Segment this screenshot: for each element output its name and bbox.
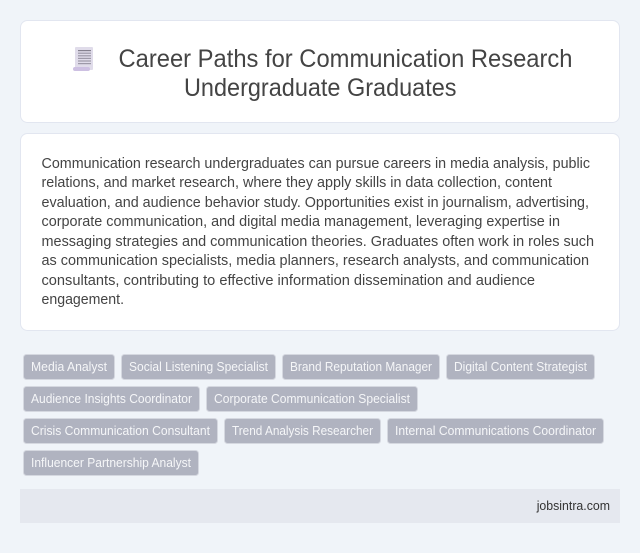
tag: Internal Communications Coordinator: Internal Communications Coordinator: [395, 424, 596, 438]
title: Undergraduate Graduates: [184, 74, 456, 102]
tag: Corporate Communication Specialist: Corporate Communication Specialist: [214, 392, 411, 406]
tag: Brand Reputation Manager: [282, 354, 440, 380]
career tags: [24, 354, 604, 476]
icon: document scroll: [73, 47, 93, 71]
tag: Influencer Partnership Analyst: [24, 450, 198, 476]
description text: engagement.: [42, 292, 124, 308]
tag: Influencer Partnership Analyst: Influencer Partnership Analyst: [31, 456, 191, 470]
description text: messaging strategies and communication theories. Graduates often work in roles such: [42, 234, 594, 250]
description text: evaluation, and audience behavior study. Opportunities exist in journalism, advertising,: [42, 195, 589, 211]
tag: Trend Analysis Researcher: [224, 418, 380, 444]
tag: Audience Insights Coordinator: [24, 386, 200, 412]
tag: Digital Content Strategist: Digital Content Strategist: [454, 360, 588, 374]
description text: consultants, contributing to effective information dissemination and audience: [42, 273, 535, 289]
tag: Digital Content Strategist: [446, 354, 594, 380]
tag: Media Analyst: [24, 354, 114, 380]
tag: Corporate Communication Specialist: [206, 386, 418, 412]
description panel: [20, 134, 620, 330]
tag: Media Analyst: Media Analyst: [31, 360, 108, 374]
tag: Crisis Communication Consultant: Crisis Communication Consultant: [31, 424, 211, 438]
description text: relations, and market research, where they apply skills in data collection, content: [42, 175, 552, 191]
header panel: [20, 20, 620, 122]
tag: Trend Analysis Researcher: Trend Analysis Researcher: [232, 424, 373, 438]
tag: Audience Insights Coordinator: Audience Insights Coordinator: [31, 392, 192, 406]
footer source text: jobsintra.com: [536, 498, 610, 513]
description text: [42, 156, 594, 308]
description text: Communication research undergraduates can pursue careers in media analysis, public: [42, 156, 590, 172]
tag: Internal Communications Coordinator: [388, 418, 604, 444]
tag: Social Listening Specialist: Social Listening Specialist: [129, 360, 269, 374]
description text: as communication specialists, media planners, research analysts, and communication: [42, 253, 589, 269]
description text: corporate communication, and digital media management, leveraging expertise in: [42, 214, 560, 230]
tag: Crisis Communication Consultant: [24, 418, 218, 444]
footer bar: [20, 489, 620, 523]
tag: Social Listening Specialist: [122, 354, 276, 380]
title: Career Paths for Communication Research: [118, 45, 572, 73]
title: [118, 45, 572, 102]
tag: Brand Reputation Manager: Brand Reputation Manager: [290, 360, 432, 374]
